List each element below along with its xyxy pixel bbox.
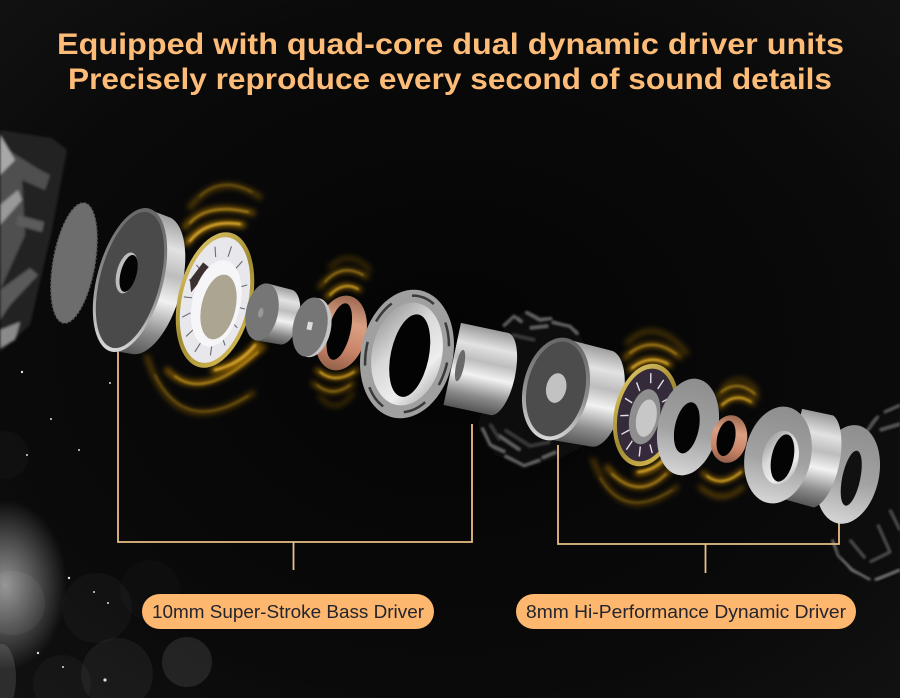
earbud shell left (0, 130, 67, 352)
title (57, 28, 844, 96)
label: hi-performance driver (516, 594, 856, 629)
sound waves: copper ring 1 (313, 258, 370, 406)
mesh filter disc (43, 199, 105, 327)
bracket: hi-performance driver (558, 445, 839, 573)
small magnet 1 (240, 280, 305, 348)
title: Precisely reproduce every second of sound details (68, 63, 832, 96)
sound waves: bass driver (147, 185, 263, 412)
washer (648, 373, 728, 481)
stepped cylinder (782, 409, 849, 511)
bass driver magnet cup (79, 200, 199, 365)
small washer with pin (287, 294, 337, 361)
label: bass driver (142, 594, 434, 629)
front washer (736, 400, 820, 510)
title: Equipped with quad-core dual dynamic driver units (57, 28, 844, 61)
copper coil ring 2 (706, 412, 752, 466)
rear ring (807, 419, 889, 530)
large vented ring (348, 281, 466, 427)
sound waves: hi-performance driver (593, 331, 687, 503)
bokeh lights (0, 371, 212, 698)
centre cylinder housing (443, 323, 524, 418)
hi-performance driver diaphragm (604, 357, 688, 473)
copper coil ring 1 (308, 290, 374, 376)
label: bass driver: 10mm Super-Stroke Bass Driver (152, 601, 424, 622)
bass driver diaphragm (163, 224, 267, 376)
label: hi-performance driver: 8mm Hi-Performance Dynamic Driver (526, 601, 846, 622)
crumpled black housing centre (478, 310, 596, 467)
sound waves: copper ring 2 (700, 379, 757, 496)
crumpled black housing right (832, 403, 900, 582)
bracket: bass driver (118, 350, 472, 570)
hi-performance driver magnet cup (513, 331, 633, 454)
